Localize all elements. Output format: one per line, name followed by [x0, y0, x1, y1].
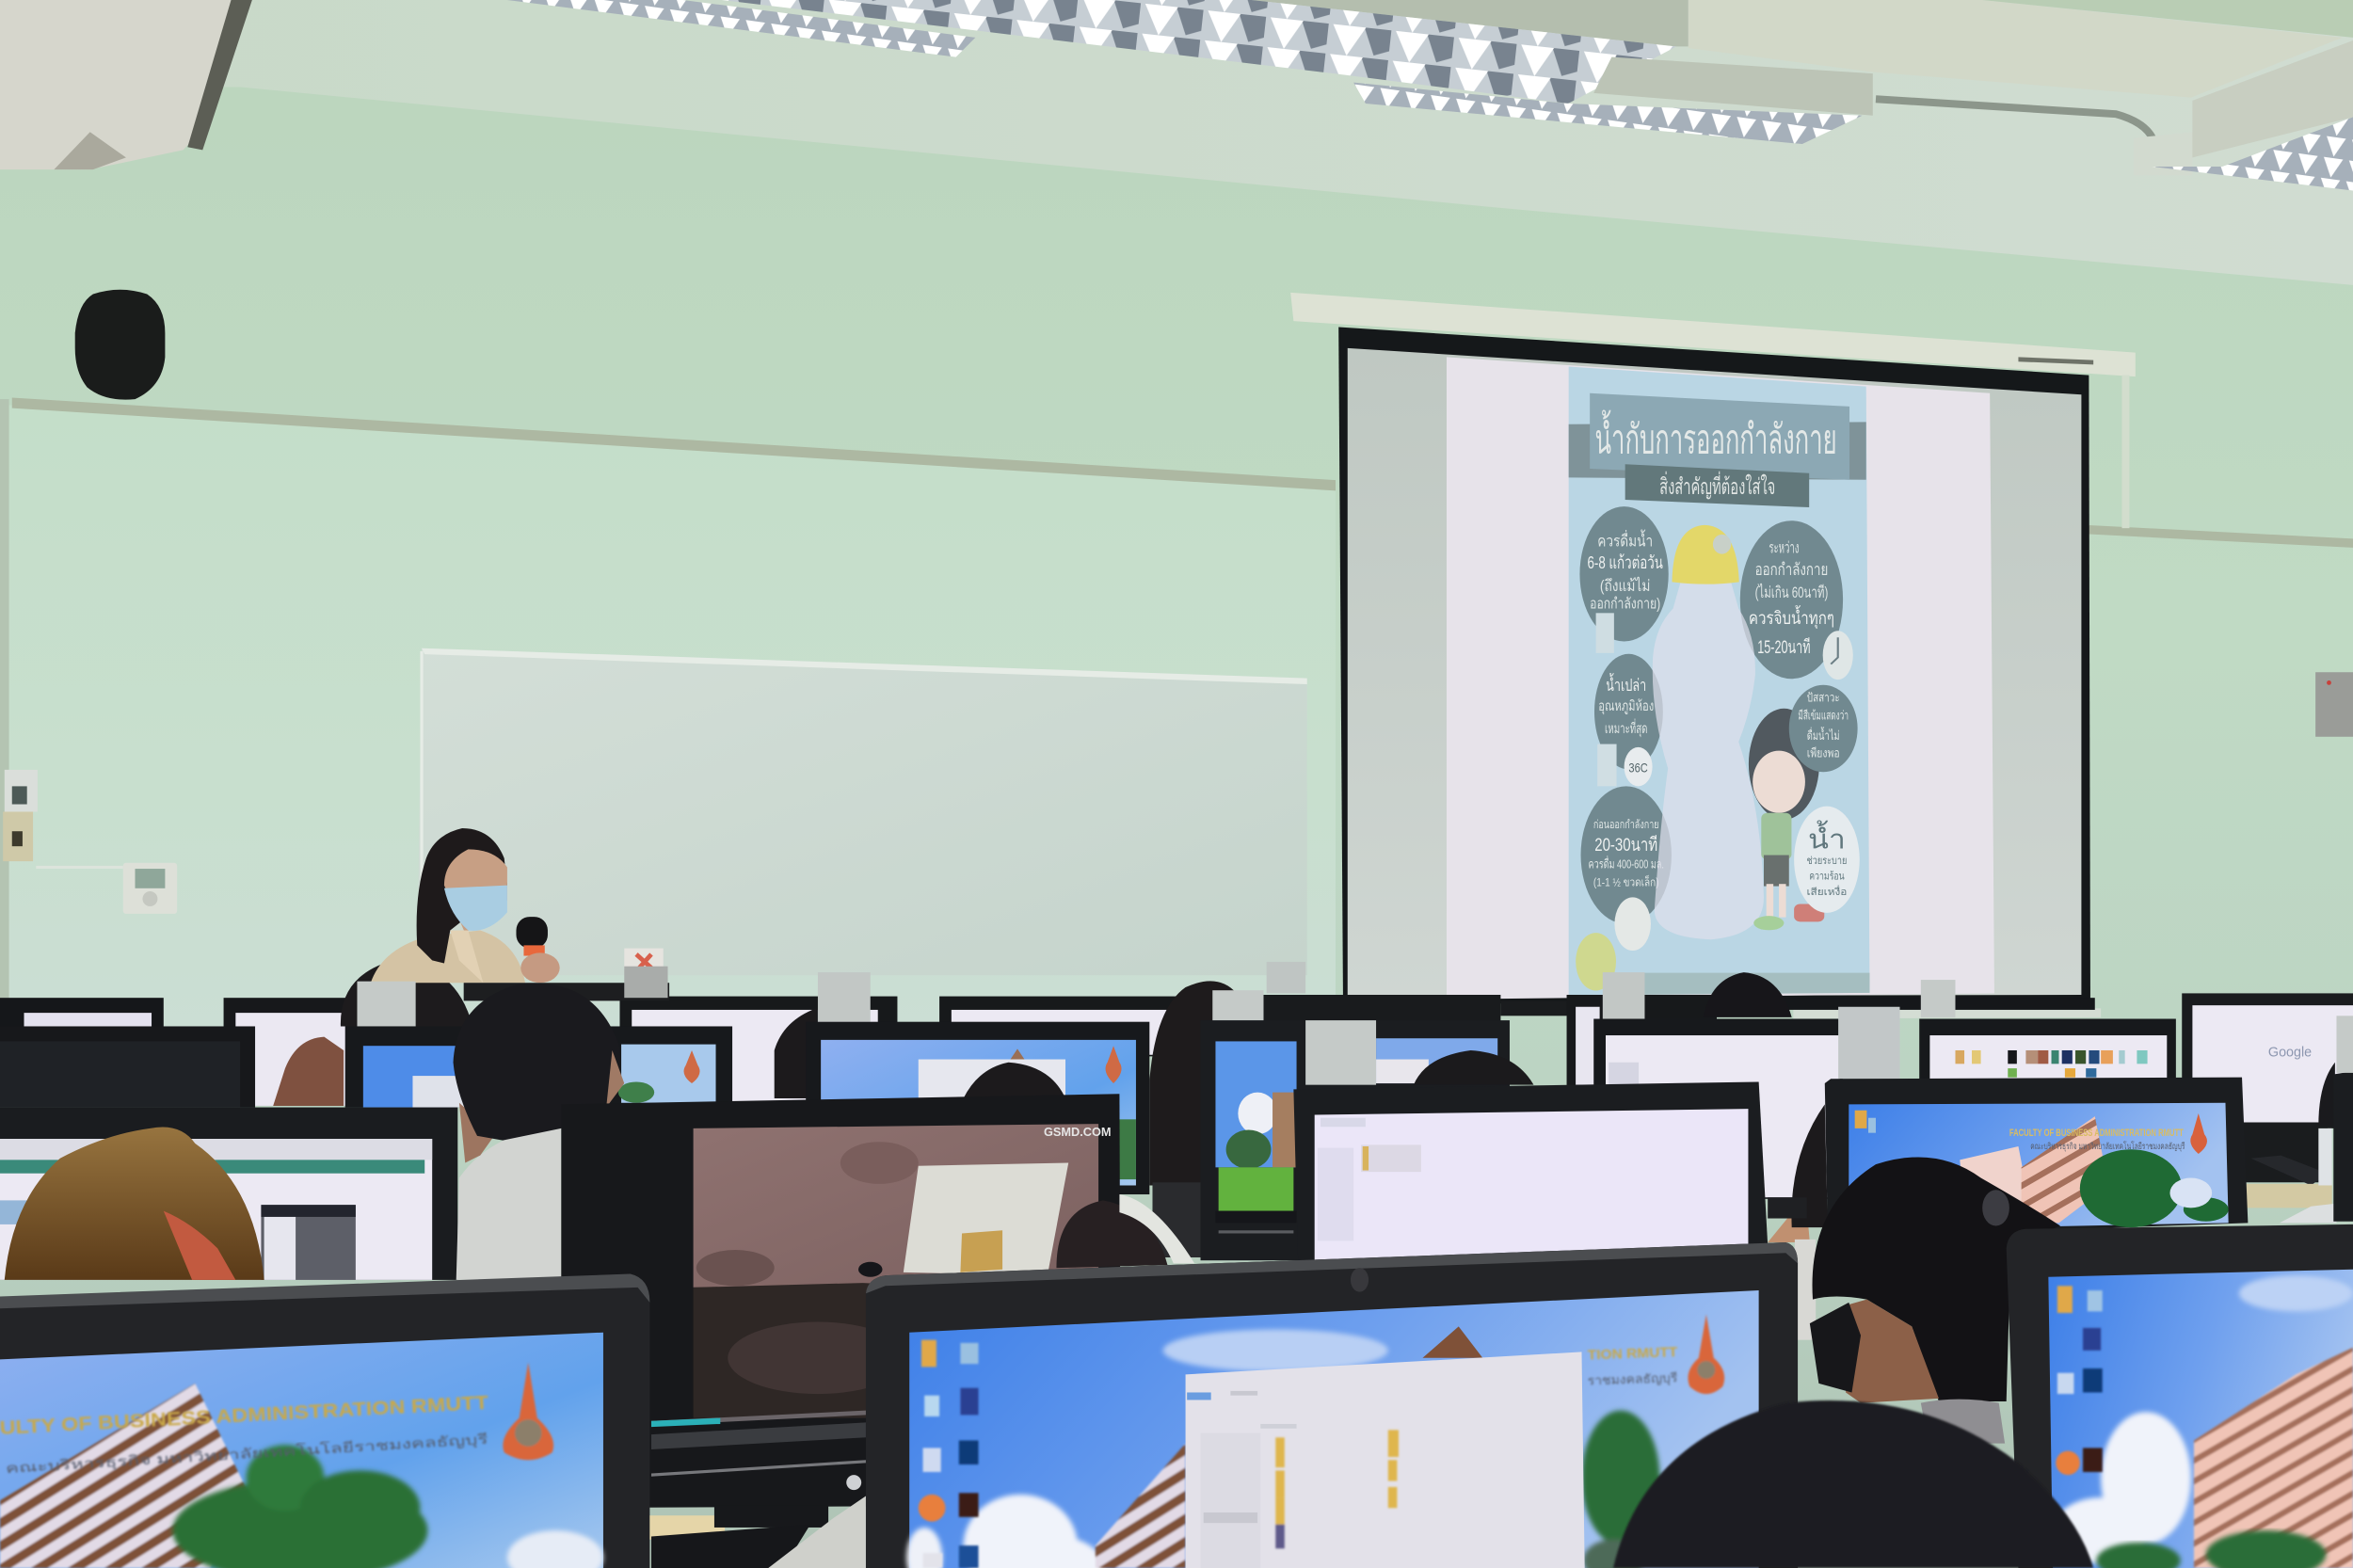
row 3 monitor: right edge — [2333, 1071, 2353, 1222]
poster bubble: during exercise: ออกกำลังกาย — [1755, 561, 1828, 580]
seal — [1688, 1315, 1724, 1394]
row 2 monitor: campus wallpaper — [1201, 1020, 1510, 1260]
file explorer window — [1186, 1352, 1585, 1568]
tree — [2206, 1530, 2326, 1568]
row 2 monitor: white screen right — [1593, 1019, 1843, 1199]
row 1 monitor: far right google page: Google — [2268, 1045, 2312, 1060]
wall panel behind whiteboard — [0, 397, 1336, 1035]
person: head behind centre monitor with hair clips — [964, 1063, 1065, 1098]
poster bubble: urine colour — [1789, 685, 1858, 772]
person: hand raised left — [273, 1037, 344, 1106]
row 1 monitor: centre left — [619, 997, 897, 1104]
person: front left student hair — [5, 1127, 264, 1280]
row 3 monitor: campus wallpaper right — [1825, 1078, 2248, 1238]
row 2 monitor: far left — [0, 1026, 255, 1108]
row 3 monitor: left browser — [0, 1108, 457, 1280]
whiteboard — [417, 648, 1307, 975]
presenter monitor back — [464, 983, 669, 1000]
person: student right with mask — [1810, 1157, 2060, 1444]
row 4 monitor: front left: คณะบริหารธุรกิจ มหาวิทยาลัยเทคโนโลยีราชมงคลธัญบุรี — [6, 1432, 488, 1477]
building — [1096, 1444, 1186, 1568]
poster bubble: after exercise: (1-1 ½ ขวดเล็ก) — [1593, 873, 1659, 888]
person: head back row left — [341, 960, 472, 1026]
row 1 monitor: far left — [0, 998, 164, 1028]
person: shoulder in white between monitors — [768, 1496, 866, 1568]
desk card with red mark — [624, 949, 668, 998]
poster bubble: plain water: เหมาะที่สุด — [1605, 718, 1647, 737]
ceiling light: lower fixture — [1353, 57, 1873, 144]
poster bubble: during exercise: ควรจิบน้ำทุกๆ — [1749, 605, 1834, 630]
poster subtitle banner: สิ่งสำคัญที่ต้องใส่ใจ — [1659, 472, 1775, 499]
person: hair behind row 2 — [775, 1008, 816, 1098]
poster bubble: after exercise: ควรดื่ม 400-600 มล. — [1589, 856, 1664, 871]
poster bubble: plain water: 36C — [1628, 760, 1648, 776]
wall trim right of screen — [2089, 525, 2353, 548]
row 4 monitor: front centre — [866, 1242, 1798, 1568]
person: head behind front monitor — [1056, 1200, 1167, 1268]
poster bubble: plain water: น้ำเปล่า — [1606, 672, 1646, 696]
poster bubble: drink 6-8 glasses: (ถึงแม้ไม่ — [1600, 576, 1650, 594]
poster subtitle banner — [1625, 464, 1809, 507]
person: right side student with mask — [2280, 1063, 2336, 1223]
speaker — [75, 290, 165, 400]
folders — [1275, 1430, 1399, 1548]
poster bubble: urine colour: มีสีเข้มแสดงว่า — [1798, 708, 1849, 722]
poster bubble: drink 6-8 glasses: 6-8 แก้วต่อวัน — [1587, 553, 1663, 573]
poster bubble: water helps: น้ำ — [1808, 821, 1846, 855]
poster footer — [1615, 973, 1869, 995]
building — [2194, 1348, 2353, 1568]
row 1 monitor: left — [224, 998, 359, 1106]
row 1 monitor: centre right — [1263, 995, 1500, 1022]
projection screen — [1338, 328, 2090, 1008]
row 3 monitor: brown photo with hp logo — [561, 1094, 1121, 1508]
row 3 monitor: campus wallpaper right: คณะบริหารธุรกิจ มหาวิทยาลัยเทคโนโลยีราชมงคลธัญบุรี — [2030, 1141, 2185, 1152]
row 4 monitor: front centre: ราชมงคลธัญบุรี — [1587, 1370, 1678, 1388]
desktop icons — [919, 1340, 979, 1568]
poster bubble: drink 6-8 glasses — [1579, 506, 1669, 653]
presenter — [371, 828, 560, 983]
ceiling light: main fixture — [507, 0, 1689, 104]
clouds — [2053, 1275, 2353, 1563]
ceiling light: right fixture — [2134, 40, 2353, 190]
person: long hair behind centre monitor — [1149, 981, 1263, 1185]
projector screen casing — [1290, 293, 2136, 376]
poster bubble: water helps — [1794, 807, 1860, 913]
desk below front left — [649, 1515, 725, 1540]
wall strip under screen — [1793, 1007, 2101, 1019]
name card on campus monitor — [1305, 1020, 1376, 1085]
row 1 monitor: far right google page — [2182, 993, 2353, 1185]
air conditioner unit — [0, 0, 252, 169]
name card far right — [2336, 1016, 2353, 1073]
person: head behind row 3 — [1414, 1050, 1533, 1085]
keyboard — [651, 1525, 810, 1568]
person: side hair and hand right of row 3 monitor — [1768, 1104, 1828, 1340]
poster bubble: urine colour: ปัสสาวะ — [1807, 691, 1840, 705]
poster bubble: plain water: อุณหภูมิห้อง — [1598, 698, 1654, 715]
black strip behind right row — [1500, 1000, 1570, 1016]
person: head back row right — [1704, 972, 1792, 1017]
person: head front right foreground — [1613, 1400, 2093, 1568]
poster bubble: during exercise: (ไม่เกิน 60นาที) — [1755, 583, 1828, 601]
row 4 monitor: front right — [2007, 1224, 2353, 1568]
row 4 monitor: front centre: TION RMUTT — [1587, 1345, 1678, 1363]
row 3 monitor: campus wallpaper right: FACULTY OF BUSINESS ADMINISTRATION RMUTT — [2009, 1128, 2184, 1139]
black chair — [1152, 1182, 1204, 1257]
projected poster — [1569, 366, 1869, 995]
poster logo — [1576, 933, 1616, 990]
row 3 monitor: white window — [1293, 1081, 1768, 1260]
projected slide page — [1447, 357, 1994, 1000]
right wall control box — [2315, 672, 2353, 737]
poster bubble: after exercise: 20-30นาที — [1594, 835, 1657, 855]
row 3 monitor: brown photo with hp logo: GSMD.COM — [1044, 1125, 1112, 1139]
row 4 monitor: front left: ULTY OF BUSINESS ADMINISTRATION RMUTT — [0, 1392, 489, 1439]
poster bubble: after exercise: ก่อนออกกำลังกาย — [1593, 818, 1659, 831]
black monitor stand — [714, 1505, 828, 1528]
wall sockets — [3, 770, 123, 869]
projector screen side bracket — [2121, 376, 2129, 528]
row 2 monitor: centre — [806, 1022, 1149, 1194]
poster bubble: during exercise — [1740, 520, 1853, 680]
row 1 monitor: centre — [939, 997, 1179, 1056]
poster bubble: drink 6-8 glasses: ออกกำลังกาย) — [1590, 595, 1660, 612]
name card row 2 right — [1838, 1007, 1899, 1079]
desk surface right — [2247, 1184, 2332, 1208]
poster bubble: after exercise — [1581, 786, 1672, 951]
name cards on monitors row 1 — [357, 962, 1955, 1026]
seal — [503, 1363, 553, 1460]
poster title banner — [1569, 393, 1866, 480]
poster bubble: plain water — [1594, 654, 1663, 786]
ceiling — [0, 0, 2353, 285]
tree — [172, 1445, 603, 1568]
tree — [1581, 1411, 1667, 1568]
poster bubble: urine colour: ดื่มน้ำไม่ — [1807, 727, 1840, 743]
poster bubble: during exercise: 15-20นาที — [1757, 637, 1811, 657]
person: white shirt shoulder — [1119, 1194, 1194, 1263]
paper card on monitor — [904, 1163, 1068, 1275]
poster bubble: urine colour: เพียงพอ — [1807, 746, 1840, 760]
poster title banner: น้ำกับการออกกำลังกาย — [1595, 410, 1837, 462]
poster bubble: during exercise: ระหว่าง — [1769, 539, 1799, 556]
person: student white shirt and head — [454, 984, 624, 1280]
poster girl character — [1749, 709, 1824, 930]
clouds — [906, 1330, 1388, 1568]
poster bubble: water helps: ความร้อน — [1809, 870, 1845, 882]
row 4 monitor: front left — [0, 1274, 649, 1568]
poster bubble: drink 6-8 glasses: ควรดื่มน้ำ — [1597, 530, 1653, 550]
row 1 monitor: right — [1567, 995, 2095, 1088]
poster bubble: water helps: เสียเหงื่อ — [1807, 885, 1847, 898]
wall thermostat — [123, 863, 177, 914]
ceiling conduit — [1876, 99, 2155, 144]
poster bubble: water helps: ช่วยระบาย — [1807, 855, 1847, 867]
row 2 monitor: thumbnails — [1919, 1019, 2176, 1079]
building — [0, 1384, 252, 1568]
name card on long hair — [1212, 990, 1263, 1023]
icons — [2056, 1286, 2103, 1475]
poster water bottle — [1653, 525, 1764, 939]
row 2 monitor: left with desktop — [345, 1026, 732, 1108]
